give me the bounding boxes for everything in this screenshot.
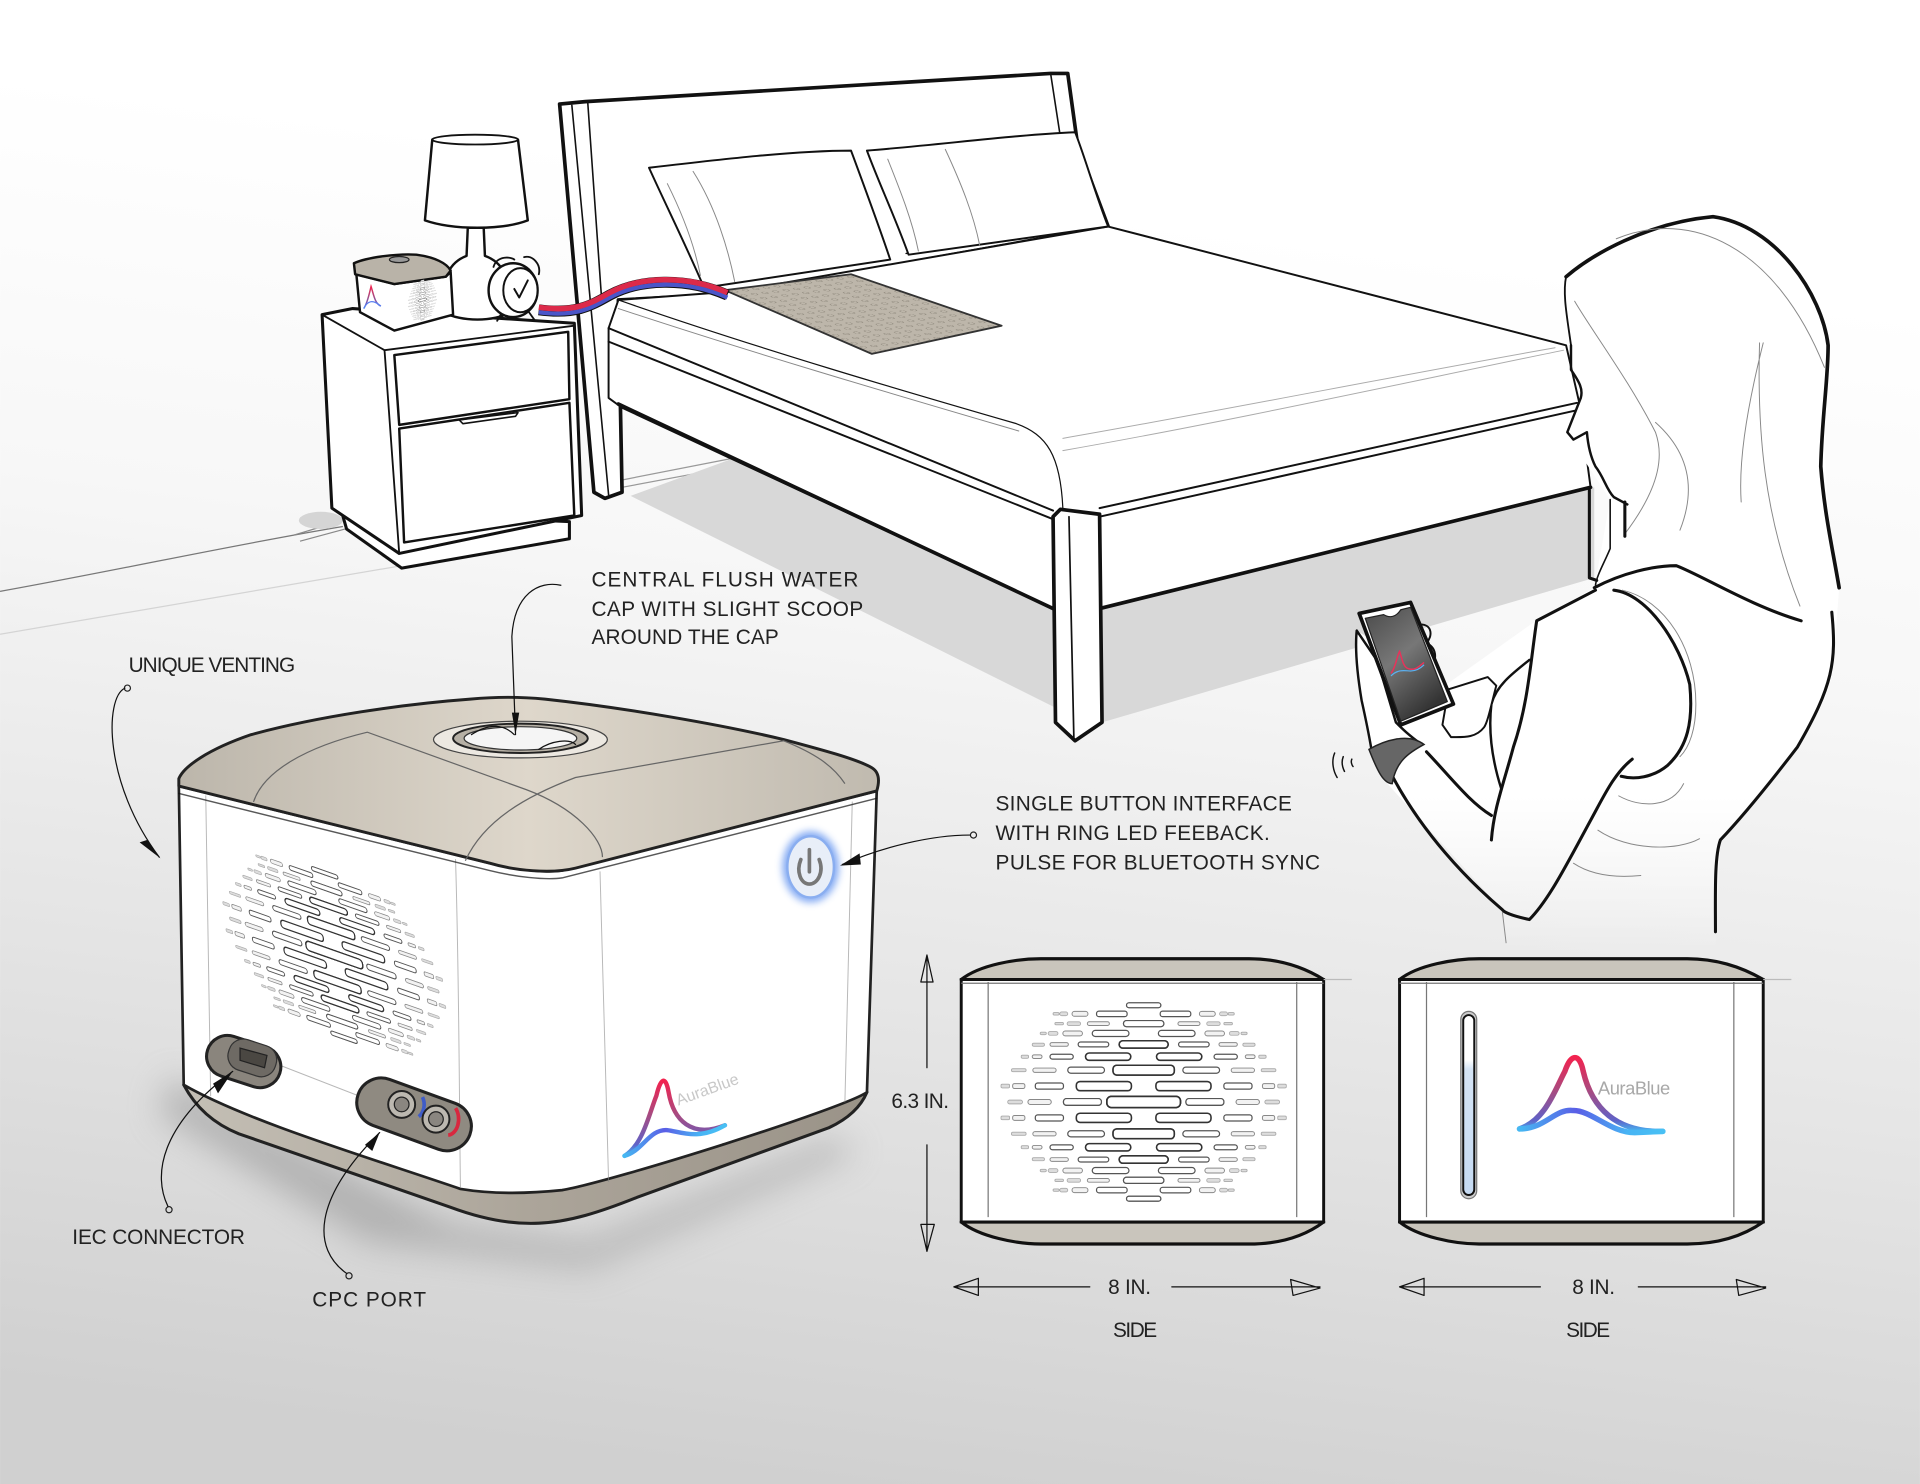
brand logo: AuraBlue [1598,1078,1670,1099]
flush water cap [433,721,607,758]
callout: central flush water cap: CAP WITH SLIGHT SCOOP [591,598,863,621]
base [184,1085,867,1223]
callout: single button interface [840,793,1320,874]
lid [179,697,878,871]
brand logo on product: AuraBlue [674,1071,741,1109]
mattress pad [725,274,1002,354]
lamp [425,135,528,320]
callout: single button interface: PULSE FOR BLUETOOTH SYNC [996,851,1320,874]
callout: central flush water cap: AROUND THE CAP [591,626,779,649]
brand logo [1520,1058,1670,1133]
rear side view with logo [1400,959,1791,1244]
bed shadow on floor [631,458,1594,722]
callout: single button interface: SINGLE BUTTON INTERFACE [996,793,1292,816]
bed post behind neck [1589,490,1625,580]
front side view with vents [961,959,1352,1244]
smart watch band [1369,738,1424,784]
dimension: height [891,955,949,1251]
dimension: width rear [1400,1276,1766,1299]
mattress and frame [609,227,1591,609]
brand logo on product [625,1071,741,1156]
IEC connector recess [201,1030,286,1093]
power button with ring LED [782,831,839,902]
body and hair [1357,217,1839,955]
headboard [560,73,1108,498]
arm [1387,759,1632,920]
dimension: height: 6.3 IN. [891,1090,949,1113]
callout: IEC connector [72,1071,245,1249]
body [179,786,877,1193]
floor and wall lines [0,455,753,634]
pillows [867,132,1108,255]
foot post [1053,509,1102,741]
dimension: width rear: 8 IN. [1572,1276,1615,1299]
woman with phone [1333,217,1839,955]
dimension: width front: 8 IN. [1108,1276,1151,1299]
label: side: SIDE [1113,1319,1157,1342]
callout: IEC connector: IEC CONNECTOR [72,1226,245,1249]
small unit on nightstand [354,254,453,331]
callout: CPC port: CPC PORT [312,1288,426,1311]
phone [1359,602,1453,725]
product perspective view [159,697,878,1267]
chest [1490,660,1529,789]
panel seams [206,796,852,1188]
callout: single button interface: WITH RING LED FEEBACK. [996,822,1270,845]
water tube cable [539,280,727,314]
CPC port recess [350,1071,478,1158]
alarm clock [489,257,539,321]
callout: unique venting: UNIQUE VENTING [129,654,295,677]
vibration marks [1333,753,1353,778]
callout: central flush water cap [512,568,863,735]
shoulder and back [1594,566,1801,621]
callout: central flush water cap: CENTRAL FLUSH WATER [591,568,858,591]
venting grille [215,832,454,1078]
hair outline [1566,217,1839,588]
ground shadow [159,1077,857,1267]
callout: CPC port [312,1133,426,1311]
water level window [1461,1011,1477,1199]
nightstand [322,309,582,568]
face profile [1567,345,1627,504]
holding hand [1356,631,1422,749]
label: side rear: SIDE [1566,1319,1610,1342]
sleeve [1491,590,1595,840]
dimension: width front [954,1276,1320,1299]
callout: unique venting [112,654,295,858]
other hand [1442,677,1496,737]
bed [560,73,1591,741]
